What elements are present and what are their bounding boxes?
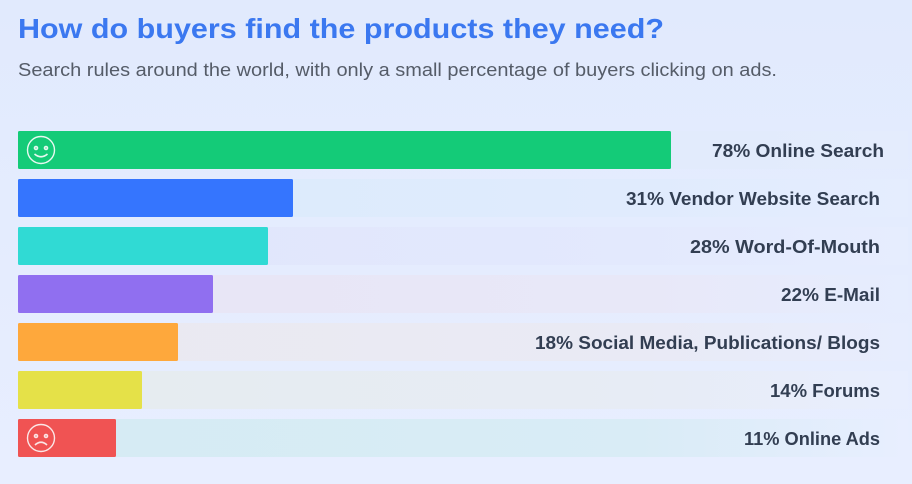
label: 18% Social Media, Publications/ Blogs: [535, 332, 880, 353]
label: 78% Online Search: [712, 140, 884, 161]
subtitle: Search rules around the world, with only a small percentage of buyers clicking on ads.: [18, 60, 777, 80]
icon: sad face: [28, 424, 54, 452]
label: 22% E-Mail: [781, 284, 880, 305]
row: social media: [18, 323, 908, 361]
row: word of mouth: [18, 227, 908, 265]
icon: smiley face: [28, 136, 54, 164]
row: online ads: [18, 419, 908, 457]
title: How do buyers find the products they need?: [18, 13, 664, 44]
label: 11% Online Ads: [744, 428, 880, 449]
label: 31% Vendor Website Search: [626, 188, 880, 209]
label: 28% Word-Of-Mouth: [690, 236, 880, 257]
row: online search: [18, 131, 908, 169]
row: forums: [18, 371, 908, 409]
row: vendor website search: [18, 179, 908, 217]
row: e-mail: [18, 275, 908, 313]
bar chart: [18, 131, 908, 457]
label: 14% Forums: [770, 380, 880, 401]
